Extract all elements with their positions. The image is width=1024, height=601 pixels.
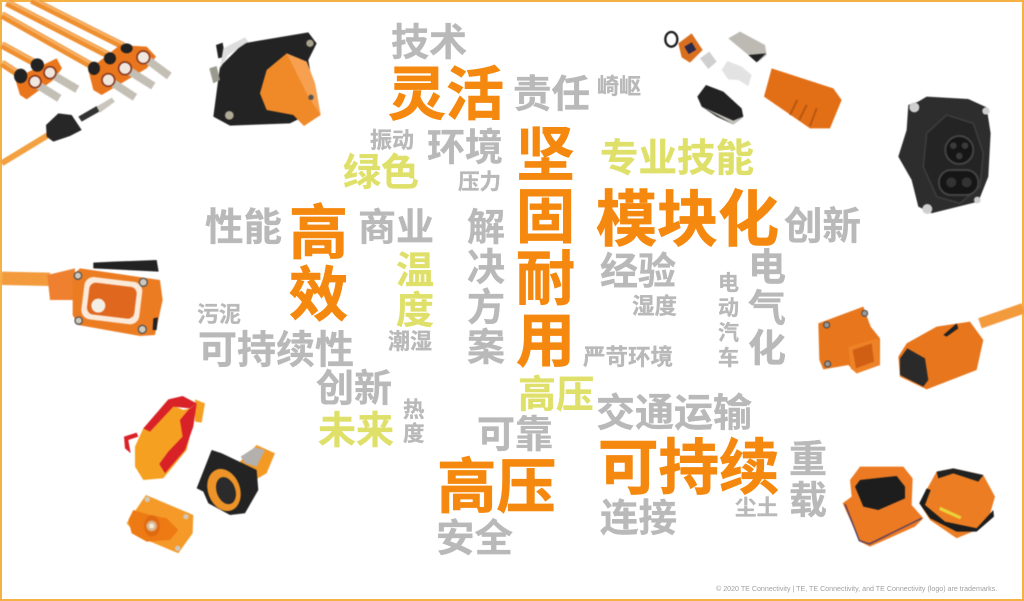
vertical word: 坚固耐用: 用 [516, 308, 575, 374]
vertical word: 重载: 载 [789, 481, 827, 523]
word: 湿度: 湿度 [632, 294, 677, 319]
word: 灵活: 灵活 [388, 62, 504, 127]
word: 潮湿: 潮湿 [388, 329, 432, 354]
vertical word: 电气化: 化 [748, 329, 786, 371]
word: 尘土: 尘土 [735, 496, 778, 520]
word: 性能: 性能 [205, 207, 282, 250]
footer trademark note: © 2020 TE Connectivity | TE, TE Connectivity, and TE Connectivity (logo) are trademarks. [716, 585, 997, 593]
vertical word: 温度 [396, 251, 434, 333]
vertical word: 高效: 高 [289, 200, 348, 266]
vertical word: 重载: 重 [789, 440, 827, 482]
vertical word: 电气化: 电 [748, 248, 786, 290]
word: 环境: 环境 [427, 128, 503, 170]
word: 安全: 安全 [436, 518, 513, 561]
vertical word: 坚固耐用: 固 [516, 184, 575, 250]
word: 高压: 高压 [437, 453, 556, 520]
vertical word: 解决方案: 解 [467, 208, 505, 250]
word: 高压: 高压 [518, 375, 594, 417]
vertical word: 坚固耐用: 耐 [516, 246, 575, 312]
word: 振动: 振动 [370, 128, 414, 153]
word: 污泥: 污泥 [197, 302, 241, 327]
word: 绿色: 绿色 [343, 153, 419, 195]
vertical word: 电动汽车: 车 [718, 347, 739, 370]
product: exploded connector parts [665, 32, 842, 128]
vertical word: 电动汽车 [718, 272, 739, 370]
vertical word: 热度 [403, 398, 425, 446]
word: 严苛环境: 严苛环境 [583, 345, 673, 370]
product: orange angled connector with cable [2, 260, 163, 336]
vertical word: 坚固耐用: 坚 [516, 122, 575, 188]
vertical word: 重载 [789, 440, 827, 523]
word: 交通运输: 交通运输 [596, 393, 752, 436]
vertical word: 电动汽车: 动 [718, 297, 739, 320]
vertical word: 解决方案 [467, 208, 505, 370]
product: black and orange open connector [197, 445, 275, 516]
vertical word: 热度: 热 [403, 398, 425, 422]
vertical word: 电气化: 气 [748, 289, 786, 331]
product: high-voltage cable terminals [2, 0, 169, 163]
product: orange square header [818, 307, 880, 373]
word: 连接: 连接 [600, 498, 677, 541]
vertical word: 解决方案: 案 [467, 328, 505, 370]
vertical word: 解决方案: 决 [467, 248, 505, 290]
word: 压力: 压力 [458, 170, 501, 194]
word: 可持续: 可持续 [598, 433, 780, 501]
product: orange sealed housing pair [843, 467, 995, 547]
vertical word: 解决方案: 方 [467, 288, 505, 330]
vertical word: 温度: 度 [396, 291, 434, 333]
vertical word: 电动汽车: 汽 [718, 322, 739, 345]
product: orange flange header [127, 495, 193, 553]
word: 创新: 创新 [784, 206, 861, 249]
word: 模块化: 模块化 [596, 185, 779, 253]
word: 可持续性: 可持续性 [198, 330, 354, 373]
word: 创新: 创新 [316, 369, 392, 411]
word: 经验: 经验 [600, 252, 676, 294]
vertical word: 坚固耐用 [516, 122, 575, 374]
vertical word: 温度: 温 [396, 251, 434, 293]
vertical word: 电动汽车: 电 [718, 272, 739, 295]
word: 商业: 商业 [358, 208, 434, 250]
word: 责任: 责任 [513, 74, 590, 117]
vertical word: 高效 [289, 200, 348, 328]
word: 可靠: 可靠 [477, 415, 553, 457]
word: 专业技能: 专业技能 [600, 138, 754, 181]
word: 技术: 技术 [391, 23, 467, 65]
word: 未来: 未来 [318, 411, 394, 453]
product: black rotary switch with orange knob [209, 32, 321, 126]
product: red latch connector [124, 396, 205, 480]
word: 崎岖: 崎岖 [597, 74, 641, 99]
vertical word: 热度: 度 [403, 422, 425, 446]
product: orange plug with cable [898, 308, 1023, 389]
product: black charging inlet [898, 97, 991, 214]
vertical word: 电气化 [748, 248, 786, 371]
vertical word: 高效: 效 [289, 262, 348, 328]
